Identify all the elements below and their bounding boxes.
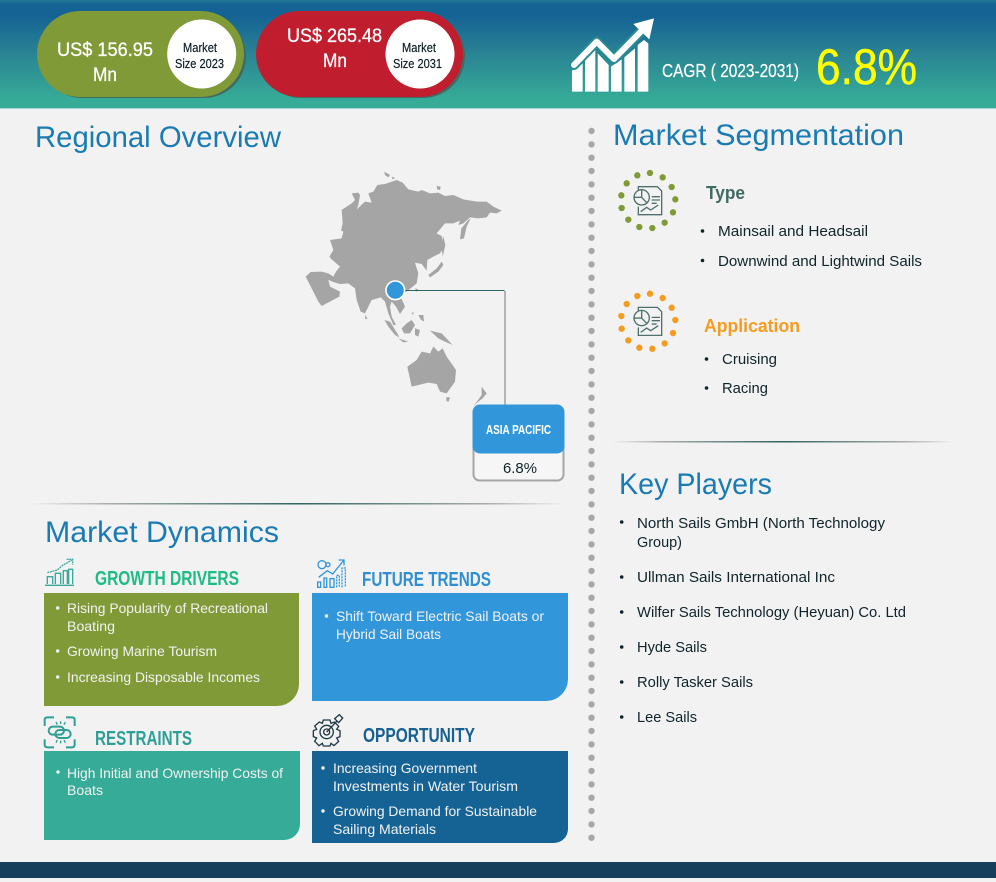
- panel: growth drivers: Boating: [67, 618, 115, 634]
- callout connector line: [405, 290, 505, 405]
- pill: market size 2023: [37, 11, 246, 98]
- panel: growth drivers: Rising Popularity of Recreational: [67, 600, 268, 616]
- icon: growth drivers: [45, 559, 74, 585]
- heading: market segmentation: Market Segmentation: [613, 119, 904, 152]
- pill: market size 2031: US$ 265.48: [287, 25, 382, 47]
- heading: opportunity: OPPORTUNITY: [363, 725, 476, 747]
- list: key players: Hyde Sails: [637, 640, 707, 656]
- list: key players: Rolly Tasker Sails: [637, 675, 753, 691]
- list: application items: [705, 352, 777, 397]
- panel: future trends: Hybrid Sail Boats: [336, 626, 441, 642]
- list: type items: Downwind and Lightwind Sails: [718, 254, 922, 270]
- list: key players: Lee Sails: [637, 710, 697, 726]
- list: type items: Mainsail and Headsail: [718, 224, 868, 240]
- callout: Asia Pacific: [472, 404, 564, 480]
- panel: opportunity: Growing Demand for Sustainable: [333, 803, 537, 819]
- panel: restraints: Boats: [67, 782, 103, 798]
- list: application items: Cruising: [722, 352, 777, 368]
- pill: market size 2031: Mn: [323, 50, 347, 72]
- panel: restraints: [44, 751, 300, 840]
- heading: key players: Key Players: [619, 468, 772, 501]
- CAGR label: CAGR ( 2023-2031): [662, 61, 799, 81]
- panel: opportunity: Sailing Materials: [333, 821, 436, 837]
- panel: restraints: High Initial and Ownership Costs of: [67, 765, 283, 781]
- header band: [0, 0, 996, 109]
- list: key players: Wilfer Sails Technology (Heyuan) Co. Ltd: [637, 605, 906, 621]
- heading: regional overview: Regional Overview: [35, 121, 281, 154]
- heading: market dynamics: Market Dynamics: [45, 516, 279, 549]
- heading: future trends: FUTURE TRENDS: [362, 569, 491, 591]
- panel: future trends: [312, 593, 568, 701]
- map marker: [386, 281, 405, 300]
- icon: growth chart with arrow: [572, 18, 654, 92]
- callout: Asia Pacific: 6.8%: [503, 460, 537, 477]
- list: type items: [701, 224, 922, 270]
- pill: market size 2023: Size 2023: [175, 56, 224, 71]
- callout: Asia Pacific: ASIA PACIFIC: [486, 423, 551, 437]
- panel: growth drivers: [44, 593, 299, 706]
- icon: application report: [618, 291, 678, 352]
- pill: market size 2023: Mn: [93, 64, 117, 86]
- icon: future trends: [318, 560, 345, 587]
- CAGR value: 6.8%: [816, 39, 917, 95]
- list: key players: North Sails GmbH (North Technology: [637, 516, 886, 532]
- subheading: type: Type: [706, 183, 745, 203]
- footer band: [0, 862, 996, 878]
- panel: opportunity: Increasing Government: [333, 760, 477, 776]
- pill: market size 2023: US$ 156.95: [57, 39, 153, 61]
- pill: market size 2031: Market: [402, 40, 436, 55]
- list: key players: Ullman Sails International Inc: [637, 570, 835, 586]
- pill: market size 2031: Size 2031: [393, 56, 442, 71]
- panel: opportunity: [312, 751, 568, 843]
- dotted vertical divider: [588, 128, 595, 841]
- icon: type report: [618, 170, 678, 231]
- list: key players: [620, 516, 906, 726]
- pill: market size 2023: Market: [183, 40, 217, 55]
- icon: restraints: [45, 717, 75, 747]
- list: key players: Group): [637, 535, 682, 551]
- panel: future trends: Shift Toward Electric Sail Boats or: [336, 608, 544, 624]
- subheading: application: Application: [704, 316, 800, 336]
- icon: opportunity: [313, 715, 343, 746]
- map: Asia Pacific: [306, 172, 502, 407]
- panel: opportunity: Investments in Water Tourism: [333, 778, 518, 794]
- list: application items: Racing: [722, 381, 768, 397]
- panel: growth drivers: Growing Marine Tourism: [67, 643, 217, 659]
- heading: restraints: RESTRAINTS: [95, 728, 192, 750]
- panel: growth drivers: Increasing Disposable Incomes: [67, 669, 260, 685]
- heading: growth drivers: GROWTH DRIVERS: [95, 568, 239, 590]
- pill: market size 2031: [256, 11, 465, 98]
